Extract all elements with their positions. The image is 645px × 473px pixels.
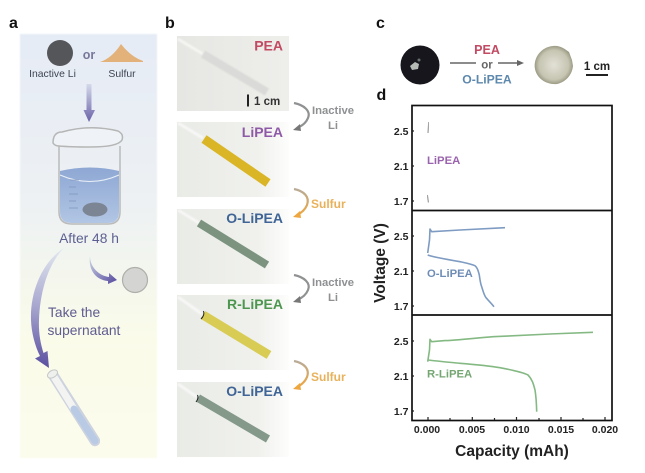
y axis tick labels: 1.7 <box>394 301 409 313</box>
y axis tick labels: 2.5 <box>394 126 409 138</box>
label: R-LiPEA: R-LiPEA <box>427 368 472 380</box>
photo: LiPEA tube <box>177 122 289 197</box>
chart frame <box>412 106 612 420</box>
photo: PEA tube: 1 cm <box>254 96 280 108</box>
arrow: to solid residue <box>90 256 117 284</box>
photo: R-LiPEA tube <box>177 295 289 370</box>
arrow: sulfur step 2 <box>293 361 346 390</box>
label: O-LiPEA: O-LiPEA <box>427 268 473 280</box>
panel d: voltage capacity chart <box>372 87 618 460</box>
text: or: or <box>83 48 95 62</box>
x axis ticks <box>428 417 605 420</box>
arrow: inactive Li step 1: Li <box>328 120 338 132</box>
y axis tick labels: 1.7 <box>394 196 409 208</box>
text: Take the supernatant: Take the <box>48 305 100 320</box>
panel a: preparation workflow <box>9 15 157 458</box>
photo: second O-LiPEA tube: O-LiPEA <box>226 383 283 399</box>
arrow: down to beaker <box>84 84 95 122</box>
panel d label: d <box>376 87 386 104</box>
panel c: lithium recovery photos <box>376 15 610 86</box>
photo: second O-LiPEA tube <box>177 382 289 457</box>
text: Sulfur: Sulfur <box>108 69 136 80</box>
arrow: inactive Li step 2: Inactive <box>312 277 354 289</box>
x axis title: Capacity (mAh) <box>455 443 569 460</box>
curve: O-LiPEA <box>428 228 505 307</box>
arrow: inactive Li step 1 <box>293 103 354 132</box>
text: Inactive Li: Inactive Li <box>29 69 76 80</box>
y axis tick labels: 2.1 <box>394 266 409 278</box>
photo: PEA tube: PEA <box>254 38 283 54</box>
panel b label: b <box>165 15 175 32</box>
photo: PEA tube <box>177 36 289 111</box>
y axis tick labels: 2.1 <box>394 371 409 383</box>
x axis tick labels: 0.020 <box>592 424 618 436</box>
panel a label: a <box>9 15 18 32</box>
arrow: inactive Li step 1: Inactive <box>312 105 354 117</box>
arrow: sulfur step 2: Sulfur <box>311 370 346 384</box>
photo: R-LiPEA tube: R-LiPEA <box>227 296 283 312</box>
arrow: inactive Li step 2: Li <box>328 292 338 304</box>
panel b: photo sequence <box>165 15 354 457</box>
photo: first O-LiPEA tube: O-LiPEA <box>226 210 283 226</box>
panel c label: c <box>376 15 385 32</box>
x axis tick labels: 0.010 <box>503 424 530 436</box>
x axis tick labels: 0.015 <box>548 424 574 436</box>
icon: inactive lithium disc <box>47 40 73 66</box>
curve: R-LiPEA <box>428 332 593 412</box>
photo: LiPEA tube: LiPEA <box>242 124 283 140</box>
text: O-LiPEA: O-LiPEA <box>462 72 512 86</box>
arrow: take the supernatant <box>31 248 64 368</box>
text: or: or <box>481 60 493 72</box>
curve: LiPEA <box>427 122 429 202</box>
y axis ticks <box>412 131 414 411</box>
icon: sulfur pile <box>100 44 143 62</box>
arrow: sulfur step 1: Sulfur <box>311 197 346 211</box>
icon: recovered disc <box>122 268 148 292</box>
arrow: sulfur step 1 <box>293 189 346 218</box>
y axis title: Voltage (V) <box>372 223 389 303</box>
y axis tick labels: 2.5 <box>394 231 409 243</box>
photo: light recovered disc <box>535 46 573 84</box>
x axis tick labels: 0.000 <box>414 424 440 436</box>
y axis tick labels <box>394 126 409 418</box>
icon: beaker with liquid and sediment <box>53 128 122 224</box>
icon: test tube with supernatant <box>46 368 95 441</box>
arrow: conversion <box>450 60 524 66</box>
photo: first O-LiPEA tube <box>177 209 289 284</box>
photo: dark lithium disc <box>400 46 440 84</box>
scale bar: 1 cm: 1 cm <box>584 61 610 73</box>
y axis tick labels: 2.1 <box>394 161 409 173</box>
panel a background <box>20 34 157 458</box>
text: PEA: PEA <box>474 43 500 57</box>
text: Take the supernatant: supernatant <box>48 323 121 338</box>
arrow: inactive Li step 2 <box>293 275 354 304</box>
x axis tick labels <box>414 424 618 436</box>
y axis tick labels: 1.7 <box>394 406 409 418</box>
label: LiPEA: LiPEA <box>427 155 460 167</box>
text: After 48 h: After 48 h <box>59 231 119 246</box>
y axis tick labels: 2.5 <box>394 336 409 348</box>
x axis tick labels: 0.005 <box>459 424 485 436</box>
